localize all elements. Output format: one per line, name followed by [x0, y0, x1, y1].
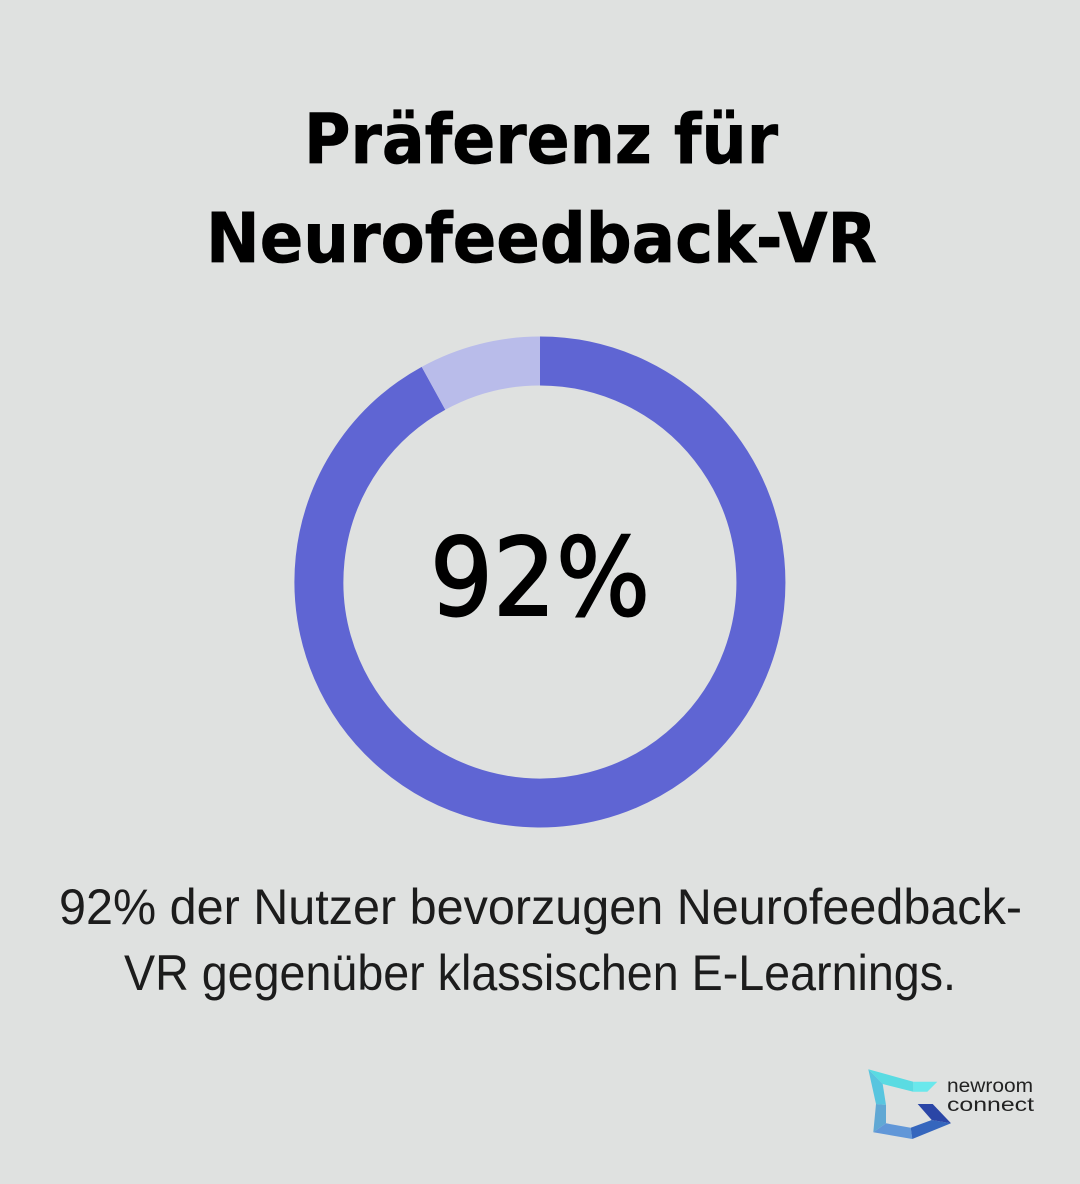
description text	[59, 879, 1022, 1001]
description text: 92% der Nutzer bevorzugen Neurofeedback-	[59, 879, 1022, 935]
title: Präferenz für	[304, 100, 778, 180]
logo wordmark: connect	[947, 1095, 1035, 1116]
title: Neurofeedback-VR	[206, 199, 877, 279]
donut chart: 92 percent	[319, 361, 761, 803]
logo wordmark	[947, 1076, 1035, 1116]
title	[206, 100, 877, 279]
donut value: 92%	[430, 516, 650, 641]
segment: remaining 8 percent	[434, 361, 540, 388]
logo mark	[868, 1069, 951, 1139]
segment: 92 percent share	[319, 361, 761, 803]
logo wordmark: newroom	[947, 1076, 1033, 1097]
logo: newroom connect	[868, 1069, 1035, 1139]
description text: VR gegenüber klassischen E-Learnings.	[124, 945, 956, 1001]
